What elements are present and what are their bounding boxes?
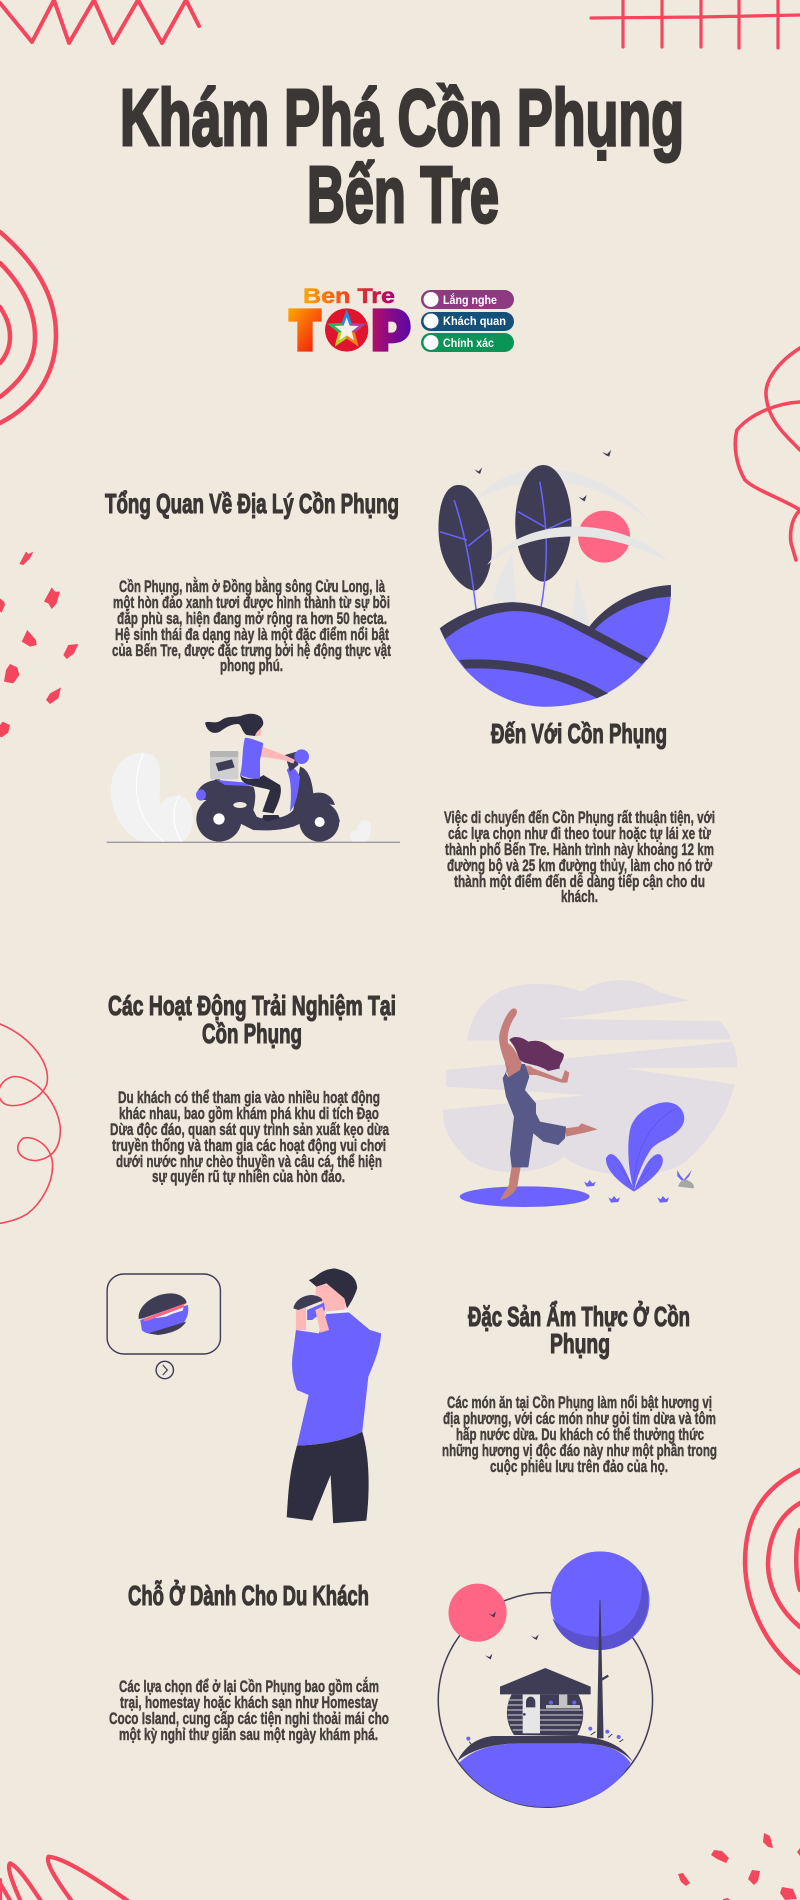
text block: Các Hoạt Động: Du khách có thể tham gia vào nhiều hoạt động: [118, 1088, 380, 1107]
decoration: bottom-left loops: [0, 1857, 128, 1900]
heading: Đặc Sản: [468, 1300, 690, 1359]
heading: Các Hoạt Động: Các Hoạt Động Trải Nghiệm Tại: [108, 990, 396, 1021]
title: Bến Tre: [307, 150, 499, 239]
logo pills: Khách quan: [443, 314, 506, 328]
heading: Các Hoạt Động: Cồn Phụng: [202, 1018, 302, 1049]
decoration: left brush dots: [0, 552, 78, 737]
text block: Chỗ Ở: trại, homestay hoặc khách sạn như Homestay: [120, 1693, 378, 1712]
text block: Các Hoạt Động: truyền thống và tham gia các hoạt động vui chơi: [112, 1136, 386, 1155]
decoration: bottom-right brush dots: [678, 1833, 800, 1900]
text block: Tổng Quan: của Bến Tre, được đặc trưng bởi hệ động thực vật: [112, 641, 391, 660]
decoration: left spiral: [0, 1024, 60, 1223]
text block: Tổng Quan: phong phú.: [220, 656, 283, 675]
text block: Chỗ Ở: Các lựa chọn để ở lại Cồn Phụng bao gồm cắm: [119, 1677, 379, 1696]
text block: Các Hoạt Động: dưới nước như chèo thuyền và câu cá, thể hiện: [116, 1152, 382, 1171]
text block: Đặc Sản: [442, 1393, 717, 1476]
decoration: right lower arcs: [745, 1470, 800, 1673]
illustration: trees and hills: [438, 450, 671, 707]
decoration: left concentric arcs: [0, 232, 56, 423]
text block: Tổng Quan: Cồn Phụng, nằm ở Đồng bằng sông Cửu Long, là: [119, 577, 385, 596]
icon: next arrow button: [156, 1361, 173, 1379]
decoration: top-left zigzag: [0, 0, 199, 43]
text block: Các Hoạt Động: [110, 1088, 389, 1186]
illustration: dancing woman: [443, 980, 737, 1207]
logo: Ben Tre TOP: [288, 285, 411, 352]
text block: Đến Với: [444, 808, 715, 906]
heading: Chỗ Ở: Chỗ Ở Dành Cho Du Khách: [128, 1579, 369, 1611]
text block: Đặc Sản: cuộc phiêu lưu trên đảo của họ.: [490, 1457, 668, 1476]
text block: Tổng Quan: đắp phù sa, hiện đang mở rộng ra hơn 50 hecta.: [117, 609, 387, 628]
text block: Đến Với: khách.: [561, 887, 598, 906]
text block: Chỗ Ở: một kỳ nghỉ thư giãn sau một ngày khám phá.: [119, 1725, 378, 1744]
text block: Tổng Quan: một hòn đảo xanh tươi được hình thành từ sự bồi: [113, 593, 390, 612]
logo pills: Chính xác: [443, 336, 494, 350]
text block: Chỗ Ở: Coco Island, cung cấp các tiện nghi thoải mái cho: [109, 1709, 389, 1728]
heading: Đến Với: Đến Với Cồn Phụng: [491, 718, 667, 749]
text block: Chỗ Ở: [109, 1677, 389, 1744]
text block: Tổng Quan: [112, 577, 391, 675]
heading: Đặc Sản: Đặc Sản Ẩm Thực Ở Cồn: [468, 1300, 690, 1332]
decoration: top-right grid: [591, 0, 800, 48]
text block: Các Hoạt Động: sự quyến rũ tự nhiên của hòn đảo.: [152, 1167, 345, 1186]
heading: Đặc Sản: Phụng: [550, 1328, 610, 1359]
logo pills: [421, 290, 514, 352]
text block: Các Hoạt Động: khác nhau, bao gồm khám phá khu di tích Đạo: [119, 1104, 379, 1123]
text block: Tổng Quan: Hệ sinh thái đa dạng này là một đặc điểm nổi bật: [115, 625, 389, 644]
icon card: burger: [107, 1274, 220, 1354]
illustration: man eating burger: [287, 1268, 381, 1523]
logo pills: Lắng nghe: [443, 292, 497, 307]
heading: Tổng Quan: Tổng Quan Về Địa Lý Cồn Phụng: [105, 488, 399, 519]
heading: Các Hoạt Động: [108, 990, 396, 1049]
title: [120, 73, 684, 239]
illustration: house in oval with balloon trees: [438, 1551, 653, 1807]
decoration: right squiggle: [735, 348, 800, 560]
text block: Các Hoạt Động: Dừa độc đáo, quan sát quy trình sản xuất kẹo dừa: [110, 1120, 389, 1139]
logo: Ben Tre TOP: Ben Tre: [303, 285, 395, 308]
illustration: woman riding scooter: [107, 714, 400, 842]
